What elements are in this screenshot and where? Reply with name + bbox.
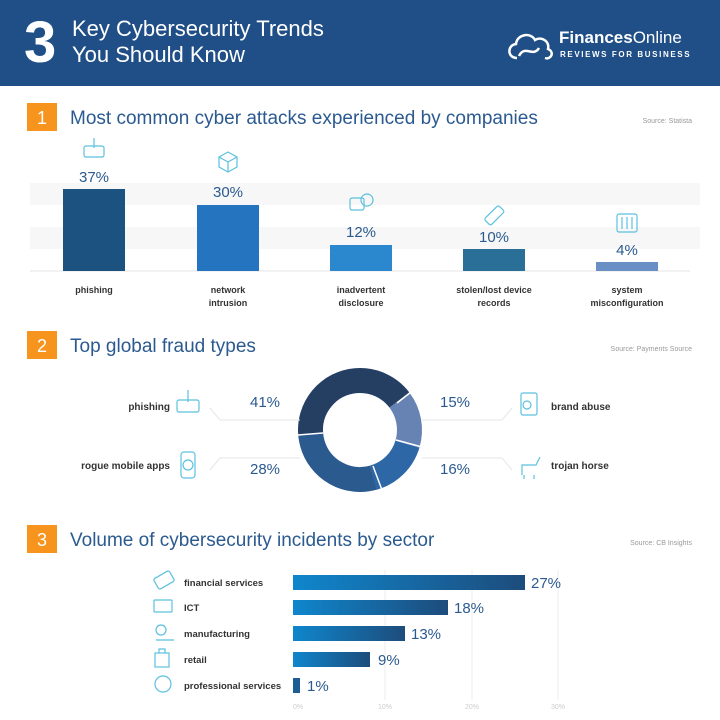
bar chart: cyber attacks: misconfiguration — [590, 298, 664, 308]
horizontal bar chart: sectors: retail — [184, 655, 207, 666]
bar chart: cyber attacks — [30, 138, 700, 308]
horizontal bar chart: sectors: 27% — [531, 575, 561, 592]
bar chart: cyber attacks: network — [211, 285, 246, 295]
section 1 heading — [27, 103, 692, 131]
horizontal bar chart: sectors: professional services — [184, 681, 281, 692]
horizontal bar chart: sectors: 18% — [454, 600, 484, 617]
donut chart: fraud types: phishing — [128, 402, 170, 413]
title text: Key Cybersecurity Trends — [72, 16, 324, 41]
bar chart: cyber attacks: 12% — [346, 224, 376, 241]
horizontal bar chart: sectors: ICT — [184, 603, 200, 614]
donut chart: fraud types — [81, 361, 611, 499]
section 2 heading: Source: Payments Source — [611, 346, 692, 353]
horizontal bar chart: sectors: 9% — [378, 652, 400, 669]
header banner — [0, 0, 720, 86]
section 2 heading — [27, 331, 692, 359]
donut chart: fraud types: trojan horse — [551, 461, 609, 472]
bar chart: cyber attacks: 4% — [616, 242, 638, 259]
section 2 heading: Top global fraud types — [70, 336, 256, 357]
horizontal bar chart: sectors: manufacturing — [184, 629, 250, 640]
donut chart: fraud types: rogue mobile apps — [81, 461, 170, 472]
section 2 heading: 2 — [37, 336, 47, 356]
section 3 heading: Volume of cybersecurity incidents by sector — [70, 530, 435, 551]
section 1 heading: 1 — [37, 108, 47, 128]
horizontal bar chart: sectors: 20% — [465, 704, 479, 711]
donut chart: fraud types: 41% — [250, 394, 280, 411]
horizontal bar chart: sectors: 0% — [293, 704, 303, 711]
section 1 heading: Most common cyber attacks experienced by companies — [70, 108, 538, 129]
donut chart: fraud types: brand abuse — [551, 402, 611, 413]
bar chart: cyber attacks: 30% — [213, 184, 243, 201]
section 1 heading: Source: Statista — [643, 118, 692, 125]
section 3 heading: 3 — [37, 530, 47, 550]
title text — [72, 16, 324, 67]
section 3 heading — [27, 525, 692, 553]
bar chart: cyber attacks: stolen/lost device — [456, 285, 532, 295]
bar chart: cyber attacks: 10% — [479, 229, 509, 246]
horizontal bar chart: sectors: 10% — [378, 704, 392, 711]
logo: REVIEWS FOR BUSINESS — [560, 50, 691, 59]
bar chart: cyber attacks: disclosure — [338, 298, 384, 308]
donut chart: fraud types: 28% — [250, 461, 280, 478]
horizontal bar chart: sectors: 13% — [411, 626, 441, 643]
bar chart: cyber attacks: intrusion — [209, 298, 247, 308]
horizontal bar chart: sectors: 30% — [551, 704, 565, 711]
logo: FinancesOnline — [559, 28, 682, 47]
bar chart: cyber attacks: records — [477, 298, 511, 308]
logo — [508, 28, 691, 60]
horizontal bar chart: sectors: 1% — [307, 678, 329, 695]
bar chart: cyber attacks: system — [611, 285, 643, 295]
bar chart: cyber attacks: 37% — [79, 169, 109, 186]
section 3 heading: Source: CB Insights — [630, 540, 692, 547]
bar chart: cyber attacks: inadvertent — [337, 285, 385, 295]
title text: You Should Know — [72, 42, 245, 67]
title number: 3 — [24, 10, 56, 75]
horizontal bar chart: sectors — [153, 570, 565, 711]
donut chart: fraud types: 16% — [440, 461, 470, 478]
bar chart: cyber attacks: phishing — [75, 285, 113, 295]
horizontal bar chart: sectors: financial services — [184, 578, 263, 589]
donut chart: fraud types: 15% — [440, 394, 470, 411]
